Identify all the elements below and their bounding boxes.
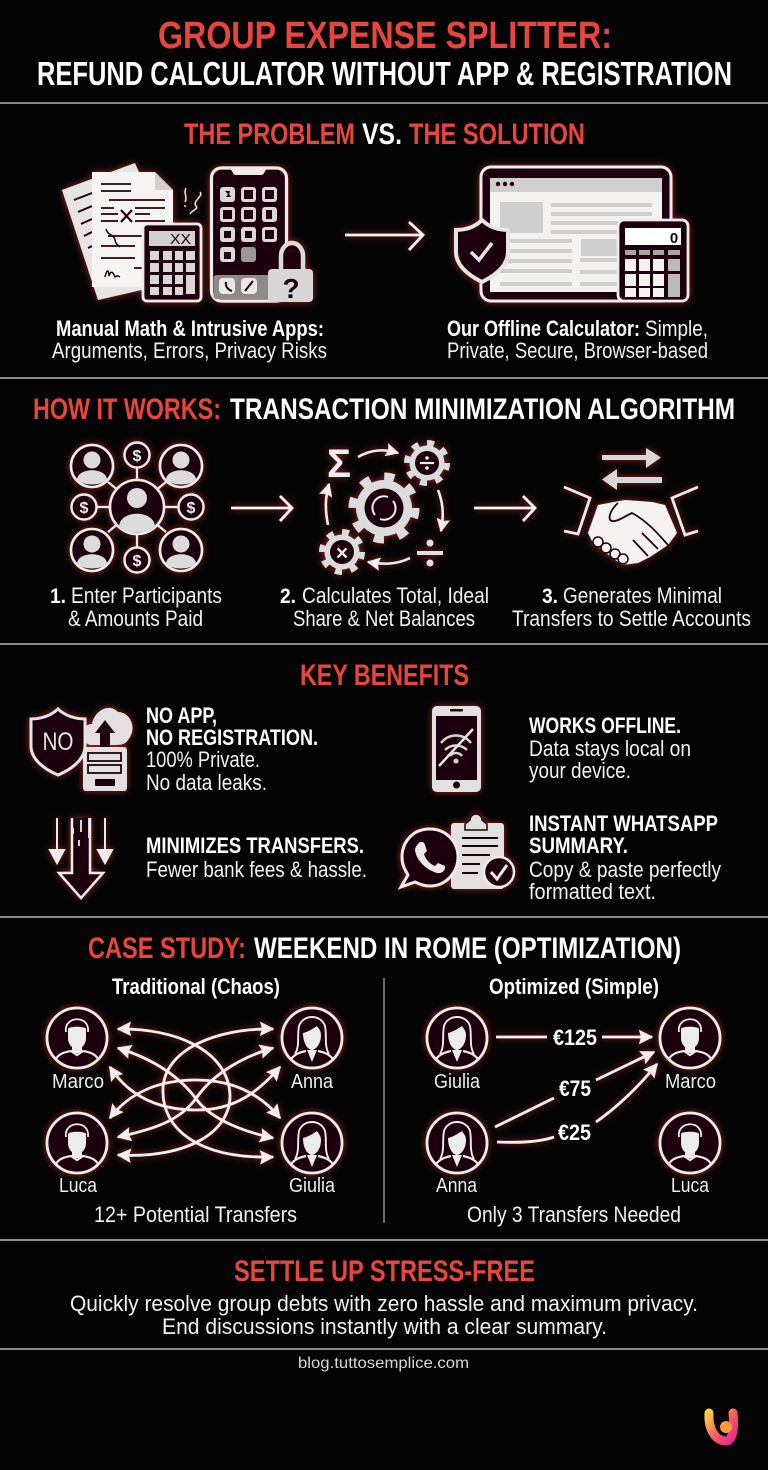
- text: step 1: & Amounts Paid: [68, 606, 203, 631]
- avatar: Giulia: [282, 1113, 342, 1173]
- text: solution caption: Simple,: [645, 316, 708, 341]
- text: problem caption: Manual Math & Intrusive Apps:: [56, 316, 324, 341]
- heading: problem vs solution: [184, 118, 585, 151]
- text: closing message: [70, 1291, 698, 1339]
- icon: handshake with exchange arrows: [564, 448, 698, 565]
- title: [37, 15, 732, 92]
- text: solution caption: Private, Secure, Browser-based: [447, 338, 708, 363]
- names: left diagram: Anna: [291, 1071, 334, 1093]
- avatar: Anna: [427, 1113, 487, 1173]
- heading: problem vs solution: VS.: [362, 118, 402, 151]
- text: instant whatsapp summary: formatted text.: [529, 879, 656, 904]
- amounts: €25: [558, 1120, 591, 1145]
- text: step 2: Calculates Total, Ideal: [302, 583, 489, 608]
- heading: problem vs solution: THE PROBLEM: [184, 118, 355, 151]
- text: works offline: [529, 713, 691, 783]
- heading: how it works: [33, 393, 735, 426]
- heading: how it works: HOW IT WORKS:: [33, 393, 221, 426]
- arrow: step 2 to 3: [474, 496, 535, 521]
- names: right diagram: Anna: [436, 1175, 478, 1197]
- text: step 1: 1.: [50, 585, 66, 608]
- text: works offline: Data stays local on: [529, 736, 691, 761]
- text: step 2: 2.: [280, 585, 296, 608]
- text: problem caption: Arguments, Errors, Privacy Risks: [52, 338, 327, 363]
- text: step 1: Enter Participants: [71, 583, 222, 608]
- heading: case study: [88, 932, 681, 965]
- icon: browser, shield and calculator: 0: [670, 230, 678, 247]
- text: closing message: End discussions instantly with a clear summary.: [162, 1314, 607, 1339]
- icon: gears and calculation cycle: Σ: [327, 442, 351, 486]
- text: instant whatsapp summary: Copy & paste perfectly: [529, 857, 721, 882]
- text: minimizes transfers: MINIMIZES TRANSFERS.: [146, 833, 364, 858]
- panel: how it works: [33, 393, 751, 631]
- text: solution caption: [447, 316, 708, 363]
- icon: paperwork, calculator, phone and lock: ?: [282, 273, 300, 304]
- icon: phone with no wifi: [432, 706, 481, 792]
- text: problem caption: [52, 316, 327, 363]
- text: step 3: [512, 583, 751, 631]
- heading: case study: CASE STUDY:: [88, 932, 246, 965]
- title: GROUP EXPENSE SPLITTER:: [158, 15, 612, 57]
- text: instant whatsapp summary: [529, 811, 721, 904]
- text: no app, no registration: [146, 703, 318, 795]
- avatar: Luca: [660, 1113, 720, 1173]
- caption: only 3 transfers: Only 3 Transfers Needed: [467, 1202, 681, 1227]
- text: step 2: Share & Net Balances: [293, 606, 475, 631]
- names: right diagram: Luca: [671, 1175, 710, 1197]
- icon: gears and calculation cycle: [322, 442, 447, 572]
- icon: paperwork, calculator, phone and lock: XX: [170, 231, 191, 248]
- avatar: Luca: [47, 1113, 107, 1173]
- avatar: Anna: [282, 1008, 342, 1068]
- arrow: problem to solution: [345, 222, 423, 250]
- text: works offline: WORKS OFFLINE.: [529, 713, 681, 738]
- panel: key benefits: [31, 659, 721, 904]
- text: step 1: [50, 583, 222, 631]
- text: closing message: Quickly resolve group debts with zero hassle and maximum privacy.: [70, 1291, 698, 1316]
- amounts: [553, 1025, 597, 1145]
- text: no app, no registration: No data leaks.: [146, 770, 267, 795]
- amounts: €125: [553, 1025, 597, 1050]
- icon: gears and calculation cycle: ×: [336, 542, 348, 565]
- text: no app, no registration: NO REGISTRATION.: [146, 725, 318, 750]
- panel: case study: [47, 932, 720, 1227]
- arrows: tangled transfers: [110, 1029, 280, 1157]
- diagram: traditional chaos: [47, 974, 342, 1227]
- text: minimizes transfers: [146, 833, 367, 882]
- heading: settle up: SETTLE UP STRESS-FREE: [234, 1255, 535, 1288]
- text: no app, no registration: NO APP,: [146, 703, 217, 728]
- icon: paperwork, calculator, phone and lock: [62, 163, 313, 304]
- amounts: €75: [559, 1076, 591, 1101]
- names: right diagram: [434, 1071, 716, 1197]
- text: instant whatsapp summary: SUMMARY.: [529, 833, 628, 858]
- text: works offline: your device.: [529, 758, 631, 783]
- arrow: step 1 to 2: [231, 496, 292, 521]
- icon: participant network: [71, 442, 204, 572]
- diagram: optimized simple: [427, 974, 720, 1227]
- icon: downward arrows: [50, 818, 112, 898]
- text: no app, no registration: 100% Private.: [146, 747, 260, 772]
- heading: key benefits: KEY BENEFITS: [300, 659, 469, 692]
- logo: [709, 1413, 734, 1441]
- names: right diagram: Marco: [665, 1071, 716, 1093]
- icon: whatsapp and clipboard: [401, 814, 514, 889]
- avatar: Marco: [47, 1008, 107, 1068]
- icon: browser, shield and calculator: [456, 167, 688, 301]
- panel: problem vs solution: [52, 118, 708, 363]
- text: step 3: Generates Minimal: [563, 583, 722, 608]
- caption: 12+ transfers: 12+ Potential Transfers: [94, 1202, 297, 1227]
- heading: problem vs solution: THE SOLUTION: [409, 118, 585, 151]
- names: right diagram: Giulia: [434, 1071, 481, 1093]
- names: left diagram: [52, 1071, 336, 1197]
- text: instant whatsapp summary: INSTANT WHATSAPP: [529, 811, 718, 836]
- text: solution caption: Our Offline Calculator:: [447, 316, 640, 341]
- subheading: optimized: Optimized (Simple): [489, 974, 659, 999]
- names: left diagram: Luca: [59, 1175, 98, 1197]
- avatar: Marco: [660, 1008, 720, 1068]
- arrows: optimized transfers: [495, 1037, 657, 1142]
- avatar: Giulia: [427, 1008, 487, 1068]
- text: step 2: [280, 583, 489, 631]
- source url: blog.tuttosemplice.com: [298, 1355, 469, 1372]
- icon: no-registration shield, cloud and form: NO: [42, 728, 74, 756]
- text: step 3: 3.: [542, 585, 558, 608]
- text: minimizes transfers: Fewer bank fees & hassle.: [146, 857, 367, 882]
- subheading: traditional: Traditional (Chaos): [112, 974, 280, 999]
- panel: closing: [70, 1255, 698, 1339]
- names: left diagram: Marco: [52, 1071, 104, 1093]
- icon: no-registration shield, cloud and form: [31, 708, 133, 791]
- names: left diagram: Giulia: [289, 1175, 336, 1197]
